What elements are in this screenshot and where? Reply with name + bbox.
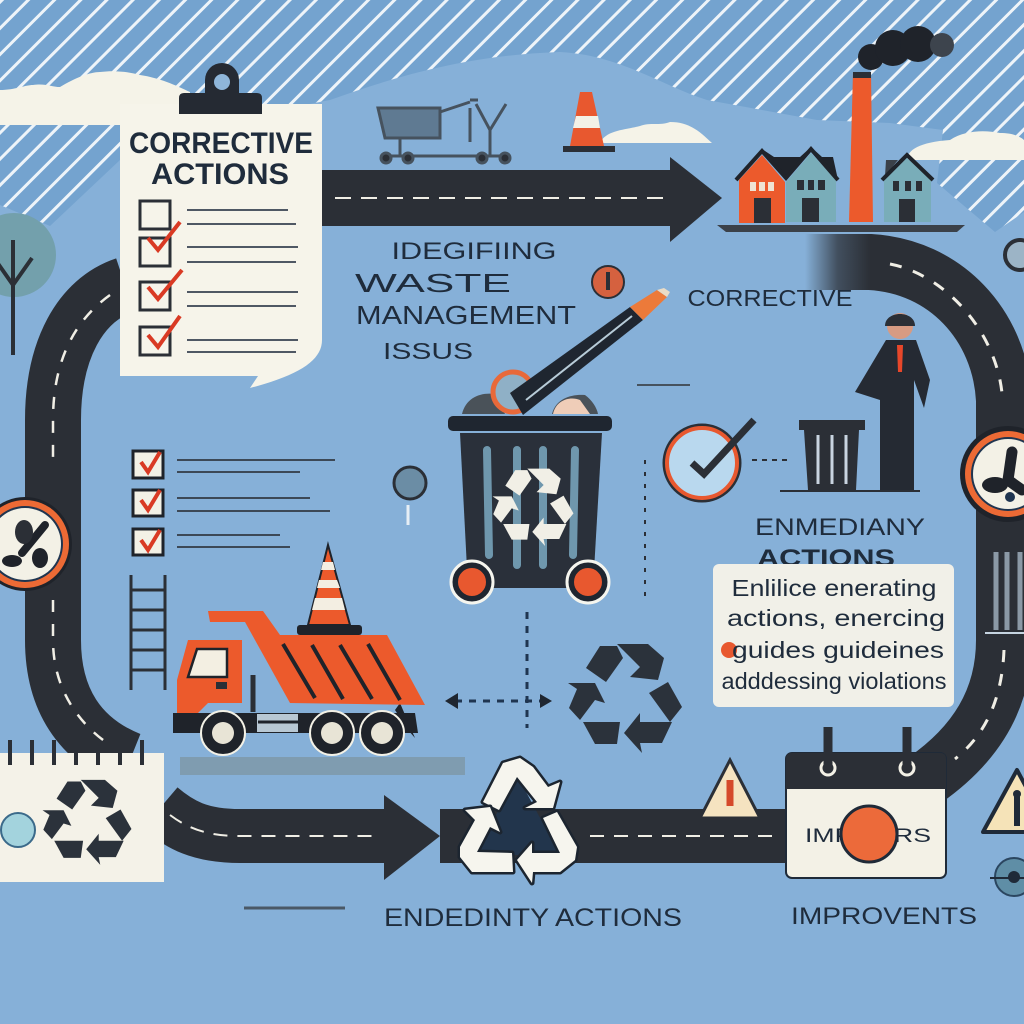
icon: ladder xyxy=(131,575,165,690)
icon: small marker xyxy=(394,467,426,525)
icon: check circle xyxy=(664,420,754,501)
road: right loop xyxy=(805,262,1004,780)
label: endedity actions: ENDEDINTY ACTIONS xyxy=(384,904,682,932)
road marker left xyxy=(0,497,72,591)
label: improvents: IMPROVENTS xyxy=(791,903,977,930)
icon: recycling bin with pen xyxy=(448,288,670,603)
callout: Enlilice enerating xyxy=(732,575,936,601)
mini checklist xyxy=(133,451,335,555)
clipboard checklist panel xyxy=(120,63,322,388)
text: enmediary actions: ACTIONS xyxy=(757,545,895,572)
icon: cone xyxy=(297,545,362,635)
notepad xyxy=(0,740,164,882)
text: enmediary actions: ENMEDIANY xyxy=(755,514,925,541)
icon: warning right xyxy=(983,770,1024,832)
callout: adddessing violations xyxy=(722,668,946,694)
silhouette equipment xyxy=(378,100,510,163)
heading: identifying: ISSUS xyxy=(383,338,473,364)
factory and houses xyxy=(717,26,965,232)
icon: eye bottom right xyxy=(990,858,1024,896)
heading: identifying: MANAGEMENT xyxy=(356,300,576,330)
calendar improvements: IMPOORS xyxy=(805,826,931,847)
text: enmediary actions xyxy=(755,514,925,572)
road marker right xyxy=(960,426,1024,522)
clouds xyxy=(0,71,1024,160)
arrow: dashed double arrow xyxy=(445,612,552,728)
tree left xyxy=(0,213,56,355)
clipboard checklist panel: ACTIONS xyxy=(151,158,289,191)
worker with bin xyxy=(780,313,930,491)
icon: warning xyxy=(700,760,760,818)
icon: cone top xyxy=(563,92,615,152)
callout xyxy=(713,564,954,707)
callout: guides guideines xyxy=(732,637,944,663)
icon: recycle on notepad xyxy=(43,780,131,865)
icon: recycle symbol xyxy=(568,644,682,753)
calendar improvements xyxy=(786,727,946,878)
callout: actions, enercing xyxy=(727,605,945,631)
icon: alert dot xyxy=(592,266,624,298)
road: bottom arrow xyxy=(160,795,800,880)
heading: corrective actions: CORRECTIVE xyxy=(129,127,313,160)
icon: large recycle triangle xyxy=(460,758,577,883)
label corrective: CORRECTIVE xyxy=(688,285,852,311)
bin on road xyxy=(985,552,1024,633)
icon: white recycle on bin xyxy=(493,469,573,546)
icon: right edge ring xyxy=(1005,240,1024,270)
heading: identifying: IDEGIFIING xyxy=(392,238,556,265)
heading: identifying xyxy=(355,238,576,364)
dump truck xyxy=(173,611,425,755)
road: top arrow xyxy=(320,157,722,242)
heading: identifying: WASTE xyxy=(355,268,511,298)
road: left loop xyxy=(53,285,130,760)
